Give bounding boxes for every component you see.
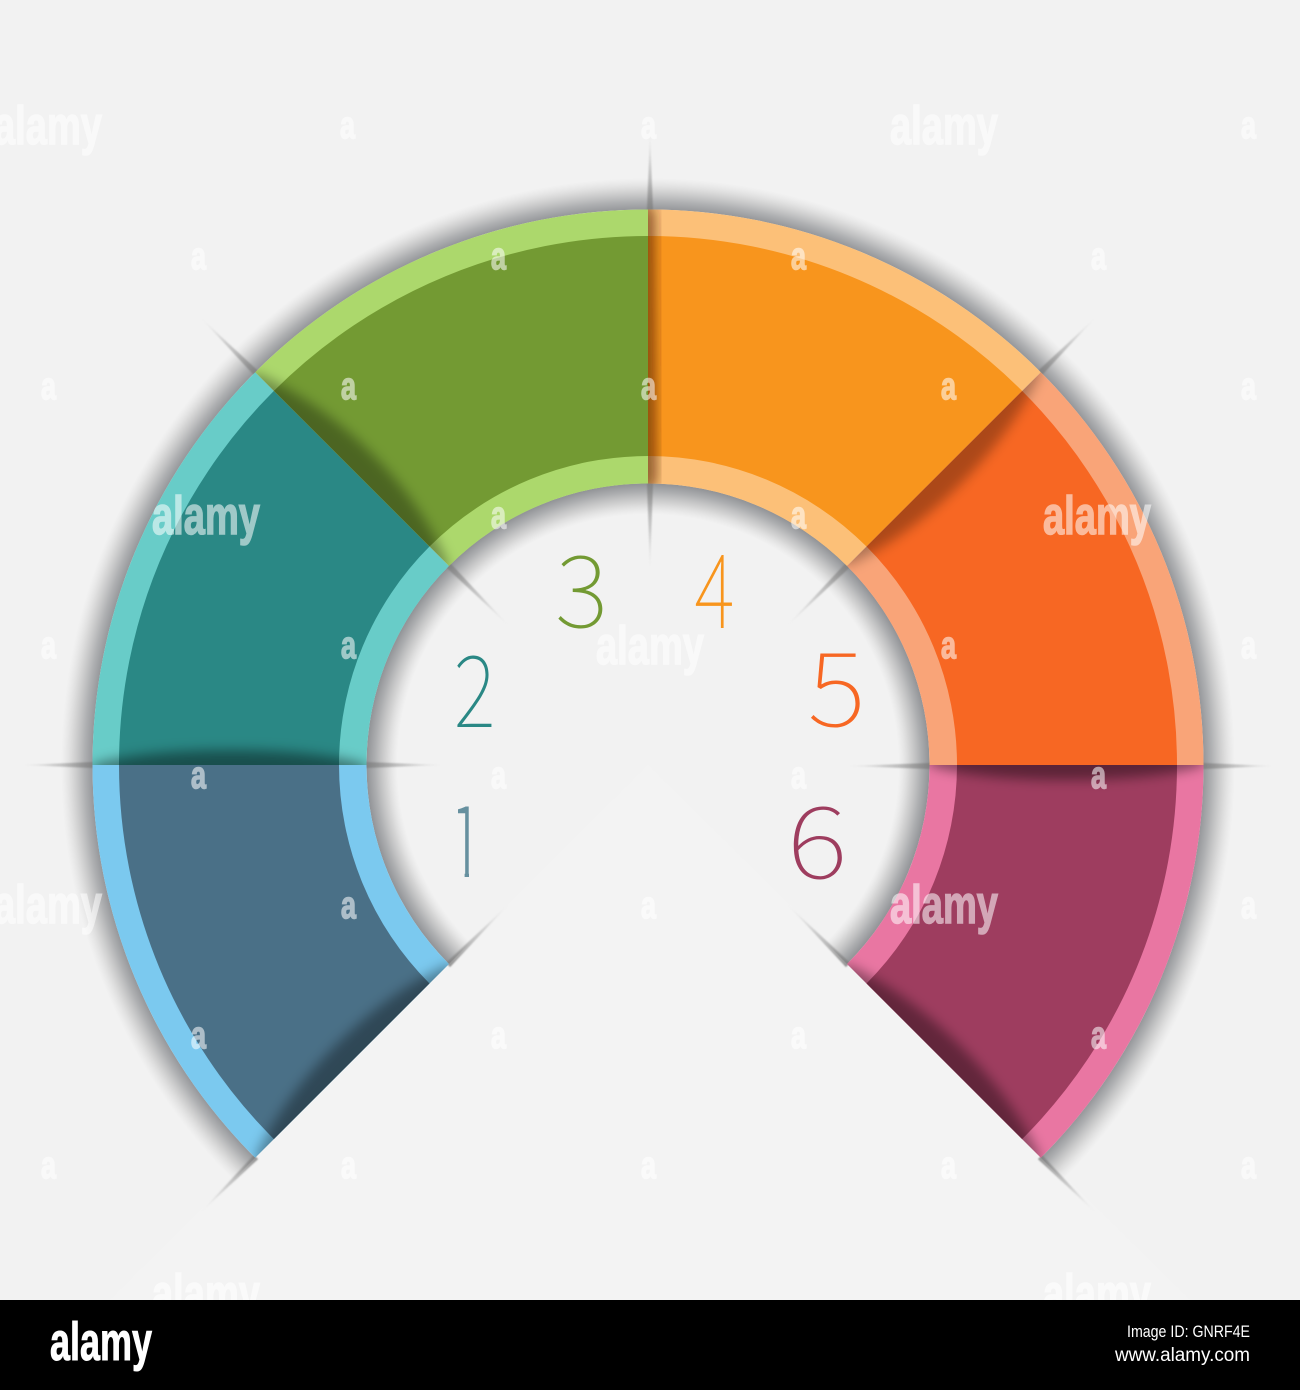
watermark: small letters: a	[641, 885, 657, 927]
image id: Image ID: GNRF4E	[1127, 1322, 1250, 1341]
watermark: large wordmarks: alamy	[1043, 1264, 1151, 1324]
number 5: 5	[808, 607, 866, 756]
watermark: small letters: a	[941, 366, 957, 408]
number 4: 4	[694, 509, 735, 659]
watermark: small letters: a	[941, 625, 957, 667]
watermark: small letters: a	[1091, 1015, 1107, 1057]
watermark: small letters: a	[491, 1015, 507, 1057]
watermark: large wordmarks: alamy	[152, 1264, 260, 1324]
footer bar	[0, 1300, 1300, 1390]
number 6: 6	[787, 763, 847, 908]
watermark: small letters: a	[791, 755, 807, 797]
watermark: small letters: a	[41, 1145, 57, 1187]
watermark: small letters: a	[1091, 236, 1107, 278]
watermark: small letters: a	[341, 625, 357, 667]
watermark: small letters: a	[791, 1015, 807, 1057]
watermark: large wordmarks: alamy	[596, 616, 704, 676]
watermark: small letters: a	[41, 625, 57, 667]
crease lines	[21, 132, 1275, 1214]
watermark: small letters: a	[1241, 885, 1257, 927]
watermark: small letters: a	[491, 495, 507, 537]
watermark: small letters: a	[641, 105, 657, 147]
watermark: small letters: a	[191, 236, 207, 278]
outer ring shadow	[58, 175, 1238, 1182]
watermark: large wordmarks: alamy	[1043, 486, 1151, 546]
watermark: large wordmarks: alamy	[890, 96, 998, 156]
segment 5: red-orange	[847, 372, 1204, 765]
watermark: small letters: a	[1241, 625, 1257, 667]
watermark: small letters: a	[791, 495, 807, 537]
watermark: small letters: a	[191, 1015, 207, 1057]
watermark: small letters: a	[340, 105, 356, 147]
watermark: small letters: a	[1241, 366, 1257, 408]
website: www.alamy.com	[1114, 1345, 1250, 1366]
watermark: small letters: a	[41, 366, 57, 408]
number 2: 2	[454, 612, 495, 757]
watermark: small letters: a	[941, 1145, 957, 1187]
lower wedge cut-out	[110, 765, 1190, 1300]
watermark: small letters: a	[641, 366, 657, 408]
watermark: small letters: a	[1091, 755, 1107, 797]
watermark: small letters: a	[491, 236, 507, 278]
watermark: large wordmarks: alamy	[890, 875, 998, 935]
watermark: small letters: a	[341, 885, 357, 927]
watermark: small letters: a	[341, 366, 357, 408]
segment 6: purple	[847, 765, 1204, 1158]
watermark: small letters: a	[341, 1145, 357, 1187]
watermark: small letters: a	[1241, 1145, 1257, 1187]
watermark: small letters: a	[491, 755, 507, 797]
segment 3: green	[255, 210, 648, 566]
watermark: small letters: a	[791, 236, 807, 278]
watermark: small letters: a	[1241, 105, 1257, 147]
watermark: small letters: a	[641, 1145, 657, 1187]
segment 2: teal	[92, 372, 449, 785]
inner ring shadow	[366, 483, 930, 964]
watermark: small letters	[41, 105, 1257, 1187]
segment 1: blue	[92, 765, 449, 1158]
watermark: small letters: a	[191, 755, 207, 797]
number 1: 1	[439, 761, 491, 906]
number 3: 3	[555, 512, 608, 657]
segment 4: orange	[636, 200, 1041, 566]
footer logo: alamy	[50, 1312, 152, 1372]
watermark: large wordmarks	[0, 96, 1151, 1324]
watermark: large wordmarks: alamy	[152, 486, 260, 546]
